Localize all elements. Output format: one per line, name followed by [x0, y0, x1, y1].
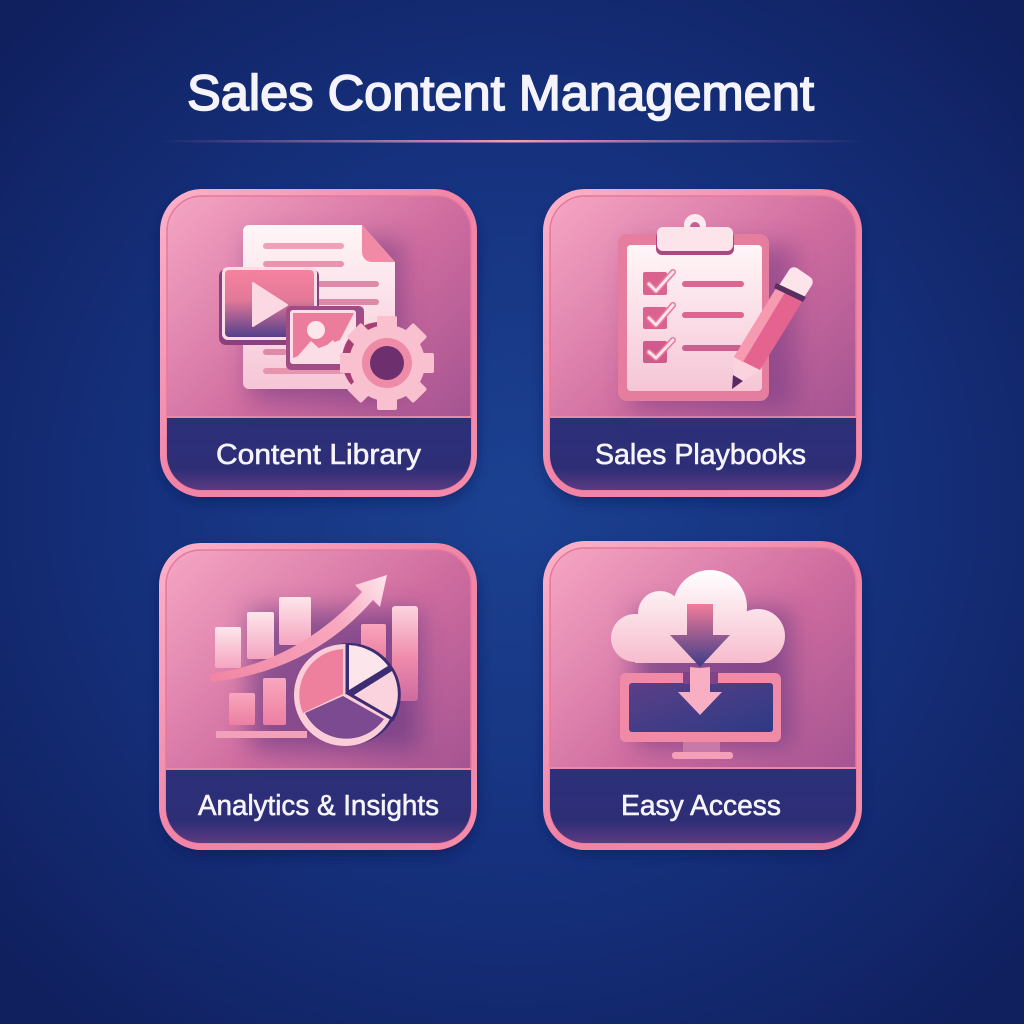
pencil [732, 267, 813, 389]
cloud [611, 570, 785, 663]
pie chart [294, 643, 400, 746]
trend arrow [210, 575, 387, 682]
label: sales playbooks: Sales Playbooks [595, 439, 806, 471]
title: Sales Content Management [187, 65, 814, 121]
bars [215, 597, 418, 738]
panel: sales playbooks [543, 189, 862, 501]
icon: documents, video, image and gear [219, 225, 434, 410]
video player [219, 267, 319, 345]
label: content library: Content Library [216, 439, 422, 471]
icon: clipboard checklist and pencil [618, 214, 813, 410]
panel: easy access [543, 541, 862, 853]
checklist [643, 272, 744, 363]
document [243, 225, 395, 389]
label: analytics and insights: Analytics & Insights [198, 790, 439, 822]
lower arrow [678, 667, 722, 715]
clipboard [618, 214, 769, 401]
gear [340, 316, 434, 410]
upper arrow [670, 604, 730, 667]
label: easy access: Easy Access [621, 790, 781, 822]
monitor [620, 672, 781, 759]
panel: analytics and insights [159, 543, 477, 855]
panel: content library [160, 189, 477, 501]
icon: cloud download to monitor [611, 570, 790, 759]
image thumbnail [286, 306, 364, 370]
icon: bar chart, trend arrow and pie chart [210, 575, 420, 750]
